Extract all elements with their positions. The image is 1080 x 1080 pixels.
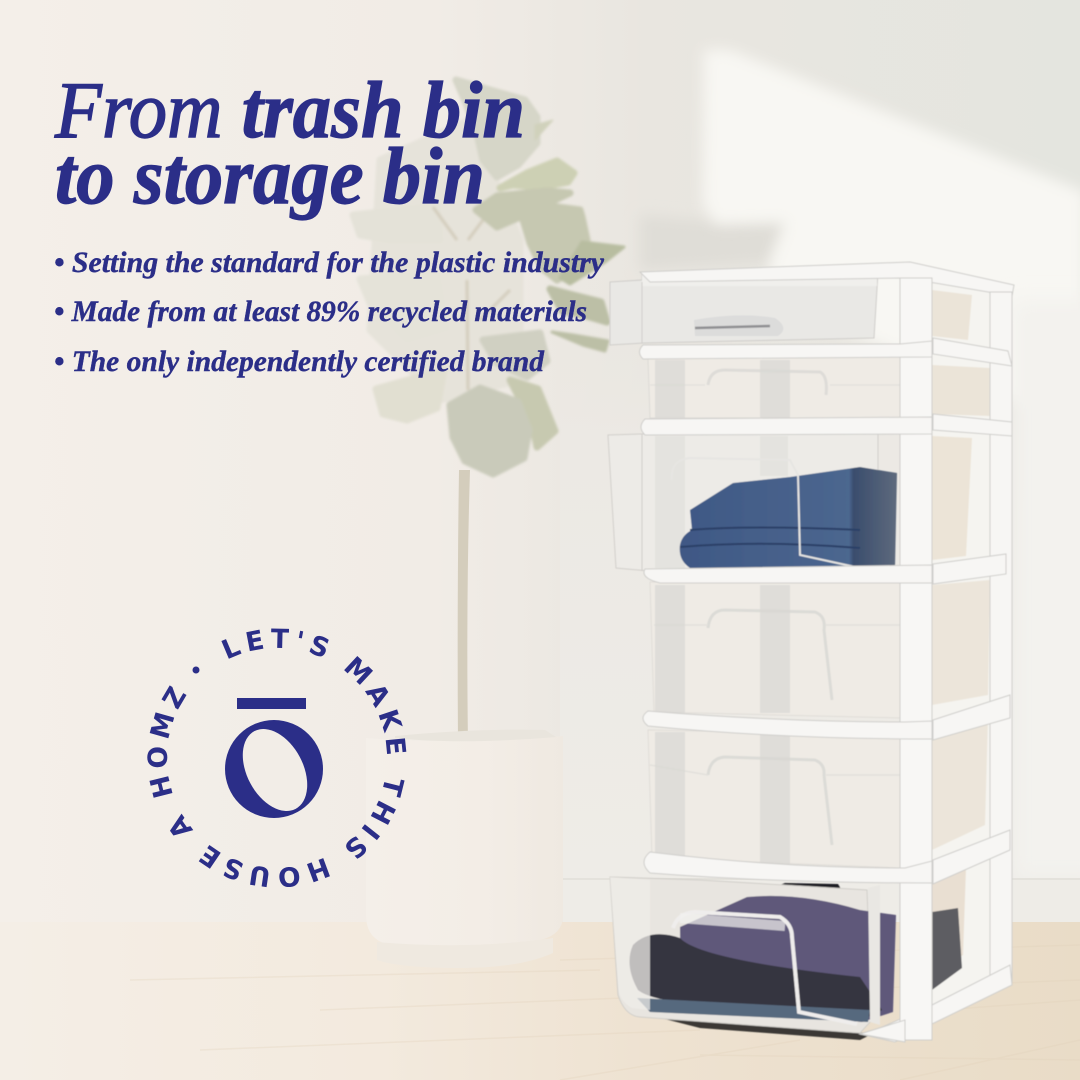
lower wall tone xyxy=(560,250,1080,890)
wall shadow below sunlight xyxy=(640,215,785,270)
drawer 3: folded jeans xyxy=(608,433,897,571)
right wall glow xyxy=(1012,300,1080,880)
drawer 2 xyxy=(648,355,912,418)
plant xyxy=(353,80,624,745)
drawer side panels xyxy=(932,283,1010,1022)
drawer 5 xyxy=(648,730,906,868)
sunlight patch on wall xyxy=(703,50,1080,430)
bullet 3: • The only independently certified brand xyxy=(54,345,545,378)
title xyxy=(54,65,525,221)
foliage xyxy=(353,80,624,474)
circular logo badge xyxy=(147,628,406,888)
bullet 2: • Made from at least 89% recycled materials xyxy=(54,295,587,328)
wooden floor xyxy=(0,922,1080,1080)
drawer 1: folded towel xyxy=(610,272,878,345)
logo macron bar xyxy=(237,698,306,709)
title line 2: to storage bin xyxy=(55,131,485,221)
shelf unit: five-drawer storage tower xyxy=(608,262,1014,1042)
white frame: posts, rails and base xyxy=(640,262,1014,1042)
plant pot xyxy=(366,730,563,968)
badge circular text: LET'S MAKE THIS HOUSE A HOMZ xyxy=(147,628,406,888)
baseboard xyxy=(563,878,1080,923)
back posts seen through drawers xyxy=(655,360,790,865)
badge dot xyxy=(192,666,200,674)
drawer 6: dark folded clothes xyxy=(610,877,896,1040)
plant stem xyxy=(458,470,470,745)
bullet list xyxy=(54,246,605,378)
title line 1: From trash bin xyxy=(54,65,525,155)
bullet 1: • Setting the standard for the plastic industry xyxy=(54,246,605,279)
drawer 4 xyxy=(650,582,908,718)
logo O mark xyxy=(225,718,323,822)
